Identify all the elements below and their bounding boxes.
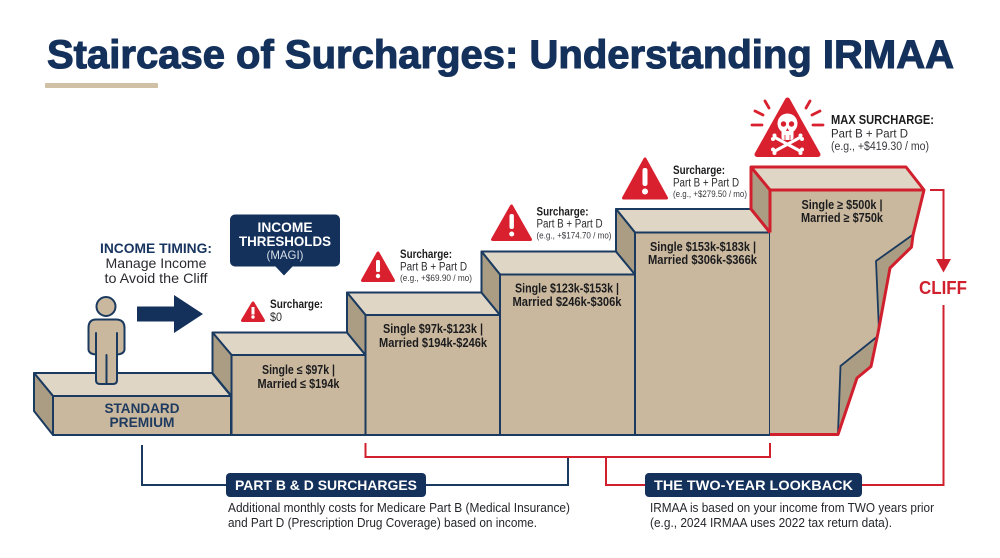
title underline bbox=[45, 83, 158, 88]
surcharge +$69.90 with warning icon: (e.g., +$69.90 / mo) bbox=[400, 273, 472, 284]
surcharge +$279.50 with warning icon: Surcharge: bbox=[673, 165, 725, 177]
step 4 bbox=[616, 209, 770, 435]
step 3: Single $123k-$153k | bbox=[515, 282, 619, 296]
step 0: standard premium: PREMIUM bbox=[110, 414, 174, 430]
surcharge +$279.50 with warning icon: Part B + Part D bbox=[673, 178, 739, 190]
surcharge $0 with warning icon bbox=[242, 299, 323, 324]
connector: navy line through surcharges label bbox=[142, 445, 568, 485]
step 4: Single $153k-$183k | bbox=[650, 240, 756, 254]
icon: person bbox=[88, 297, 124, 384]
step 3 bbox=[482, 252, 635, 435]
title: Staircase of Surcharges: Understanding IRMAA bbox=[47, 33, 954, 77]
surcharge +$174.70 with warning icon: (e.g., +$174.70 / mo) bbox=[536, 230, 612, 242]
income timing callout bbox=[100, 240, 212, 286]
arrow: income direction bbox=[137, 295, 203, 333]
step 0: standard premium: STANDARD bbox=[104, 400, 180, 416]
surcharge +$279.50 with warning icon bbox=[624, 159, 747, 200]
surcharge +$279.50 with warning icon: (e.g., +$279.50 / mo) bbox=[673, 189, 747, 200]
income timing callout: Manage Income bbox=[106, 255, 207, 271]
surcharge +$69.90 with warning icon: Surcharge: bbox=[400, 249, 452, 261]
step 3: Married $246k-$306k bbox=[512, 295, 622, 309]
step 5: cliff block bbox=[751, 167, 924, 434]
panel: two-year lookback: THE TWO-YEAR LOOKBACK bbox=[654, 477, 853, 493]
callout: income thresholds: THRESHOLDS bbox=[239, 233, 331, 249]
max surcharge text: (e.g., +$419.30 / mo) bbox=[831, 141, 929, 153]
surcharge +$69.90 with warning icon: Part B + Part D bbox=[400, 262, 467, 274]
step 5: cliff block: Single ≥ $500k | bbox=[802, 198, 882, 212]
connector: lookback red line bbox=[860, 305, 944, 485]
callout: income thresholds: INCOME bbox=[258, 219, 312, 235]
step 1: lowest bracket bbox=[212, 332, 366, 435]
max surcharge text: Part B + Part D bbox=[831, 126, 908, 140]
step 1: lowest bracket: Married ≤ $194k bbox=[258, 377, 340, 391]
connector: red surcharge bracket bbox=[366, 443, 770, 457]
callout: income thresholds bbox=[230, 214, 340, 276]
max surcharge text bbox=[831, 113, 934, 153]
panel: two-year lookback bbox=[645, 473, 934, 530]
cliff arrow and label bbox=[919, 190, 967, 298]
panel: part B and D surcharges bbox=[226, 473, 570, 530]
max surcharge text: MAX SURCHARGE: bbox=[831, 113, 934, 127]
surcharge $0 with warning icon: $0 bbox=[270, 312, 282, 324]
income timing callout: to Avoid the Cliff bbox=[104, 270, 208, 286]
step 5: cliff block: Married ≥ $750k bbox=[801, 211, 883, 225]
panel: part B and D surcharges: PART B & D SURCHARGES bbox=[235, 477, 417, 493]
surcharge +$174.70 with warning icon: Part B + Part D bbox=[536, 218, 602, 230]
income timing callout: INCOME TIMING: bbox=[100, 240, 212, 256]
step 4: Married $306k-$366k bbox=[648, 253, 757, 267]
connector: red bracket to lookback bbox=[606, 457, 646, 485]
icon: skull warning bbox=[752, 100, 823, 155]
panel: two-year lookback: (e.g., 2024 IRMAA uses 2022 tax return data). bbox=[650, 516, 892, 530]
panel: part B and D surcharges: and Part D (Prescription Drug Coverage) based on income. bbox=[228, 516, 537, 530]
surcharge +$174.70 with warning icon: Surcharge: bbox=[536, 206, 588, 218]
step 2 bbox=[347, 292, 500, 435]
surcharge +$174.70 with warning icon bbox=[492, 206, 612, 242]
surcharge +$69.90 with warning icon bbox=[362, 249, 472, 284]
step 2: Single $97k-$123k | bbox=[383, 322, 483, 336]
step 0: standard premium bbox=[34, 373, 231, 435]
step 1: lowest bracket: Single ≤ $97k | bbox=[262, 363, 335, 377]
surcharge $0 with warning icon: Surcharge: bbox=[270, 299, 323, 311]
cliff arrow and label: CLIFF bbox=[919, 278, 967, 298]
callout: income thresholds: (MAGI) bbox=[266, 248, 304, 262]
step 2: Married $194k-$246k bbox=[379, 336, 487, 350]
panel: two-year lookback: IRMAA is based on your income from TWO years prior bbox=[650, 501, 934, 515]
panel: part B and D surcharges: Additional monthly costs for Medicare Part B (Medical Insurance) bbox=[228, 501, 570, 515]
